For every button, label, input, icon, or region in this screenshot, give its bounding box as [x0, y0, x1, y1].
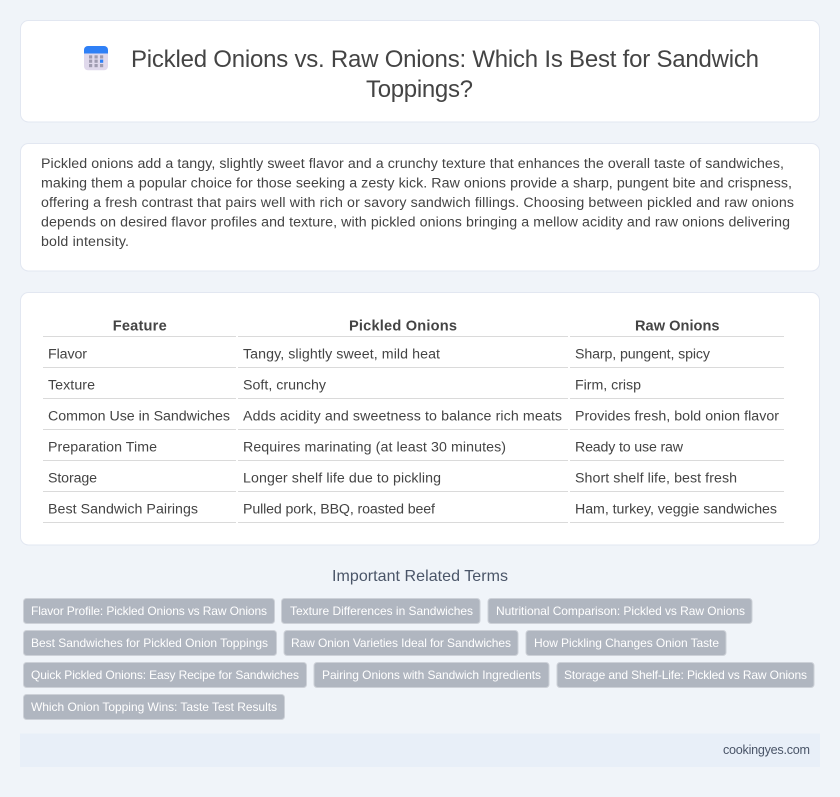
text block: intro: [41, 156, 794, 250]
tag 4: Best Sandwiches for Pickled Onion Toppings: [31, 636, 268, 650]
tag 3: [488, 598, 752, 624]
row: preparation time: Preparation Time: [48, 439, 157, 455]
row: best pairings: Pulled pork, BBQ, roasted beef: [243, 501, 435, 517]
tag 8: Pairing Onions with Sandwich Ingredients: [322, 668, 541, 682]
title: [131, 46, 759, 103]
footer: [20, 734, 820, 767]
text block: intro: depends on desired flavor profiles and texture, with pickled onions bringing a mellow acidity and raw onions delivering: [41, 214, 790, 230]
tag 3: Nutritional Comparison: Pickled vs Raw Onions: [496, 604, 745, 618]
row: storage: [48, 470, 737, 486]
footer: cookingyes.com: [723, 743, 810, 757]
tag 1: [24, 598, 274, 624]
row: storage: Short shelf life, best fresh: [575, 470, 737, 486]
tag 6: [526, 630, 726, 656]
text block: intro: bold intensity.: [41, 234, 129, 250]
row: common use: Adds acidity and sweetness to balance rich meats: [243, 408, 562, 424]
row: texture: [48, 377, 641, 393]
tag 9: Storage and Shelf-Life: Pickled vs Raw Onions: [564, 668, 807, 682]
tag 10: Which Onion Topping Wins: Taste Test Results: [31, 700, 277, 714]
row: preparation time: Ready to use raw: [575, 439, 684, 455]
panel: comparison table: [20, 292, 820, 545]
row: preparation time: [48, 439, 684, 455]
panel: header: [20, 20, 820, 122]
tag 5: [284, 630, 518, 656]
row: texture: Texture: [48, 377, 95, 393]
title: Pickled Onions vs. Raw Onions: Which Is Best for Sandwich: [131, 46, 759, 73]
title: Toppings?: [366, 76, 473, 103]
tag 2: [282, 598, 480, 624]
heading: related terms: Important Related Terms: [332, 568, 508, 585]
row: best pairings: Ham, turkey, veggie sandwiches: [575, 501, 777, 517]
row: texture: Firm, crisp: [575, 377, 641, 393]
text block: intro: Pickled onions add a tangy, slightly sweet flavor and a crunchy texture that enhances the overall taste of sandwiches,: [41, 156, 784, 172]
row: common use: [48, 408, 779, 424]
table header row: Feature: [113, 318, 167, 334]
tag 9: [557, 662, 814, 688]
row: flavor: [48, 346, 711, 362]
row: flavor: Flavor: [48, 346, 87, 362]
tag 7: Quick Pickled Onions: Easy Recipe for Sandwiches: [31, 668, 299, 682]
row: flavor: Sharp, pungent, spicy: [575, 346, 711, 362]
tag 10: [24, 694, 284, 720]
tag 1: Flavor Profile: Pickled Onions vs Raw Onions: [31, 604, 267, 618]
row: common use: Provides fresh, bold onion flavor: [575, 408, 779, 424]
related term tags: [24, 598, 814, 720]
text block: intro: making them a popular choice for those seeking a zesty kick. Raw onions provide a sharp, pungent bite and crispness,: [41, 176, 792, 192]
tag 8: [314, 662, 549, 688]
tag 7: [24, 662, 306, 688]
table header row: Raw Onions: [635, 318, 720, 334]
row: storage: Longer shelf life due to pickling: [243, 470, 441, 486]
row: flavor: Tangy, slightly sweet, mild heat: [243, 346, 440, 362]
row: common use: Common Use in Sandwiches: [48, 408, 230, 424]
row: best pairings: [48, 501, 777, 517]
icon: calendar: [84, 46, 108, 70]
table header row: [113, 318, 719, 334]
row: preparation time: Requires marinating (at least 30 minutes): [243, 439, 506, 455]
panel: intro paragraph: [20, 144, 820, 271]
row: best pairings: Best Sandwich Pairings: [48, 501, 198, 517]
tag 4: [24, 630, 276, 656]
row: storage: Storage: [48, 470, 97, 486]
text block: intro: offering a fresh contrast that pairs well with rich or savory sandwich fillings. Choosing between pickled and raw onions: [41, 195, 794, 211]
tag 5: Raw Onion Varieties Ideal for Sandwiches: [291, 636, 511, 650]
row: texture: Soft, crunchy: [243, 377, 327, 393]
tag 2: Texture Differences in Sandwiches: [290, 604, 473, 618]
tag 6: How Pickling Changes Onion Taste: [534, 636, 719, 650]
table header row: Pickled Onions: [349, 318, 457, 334]
